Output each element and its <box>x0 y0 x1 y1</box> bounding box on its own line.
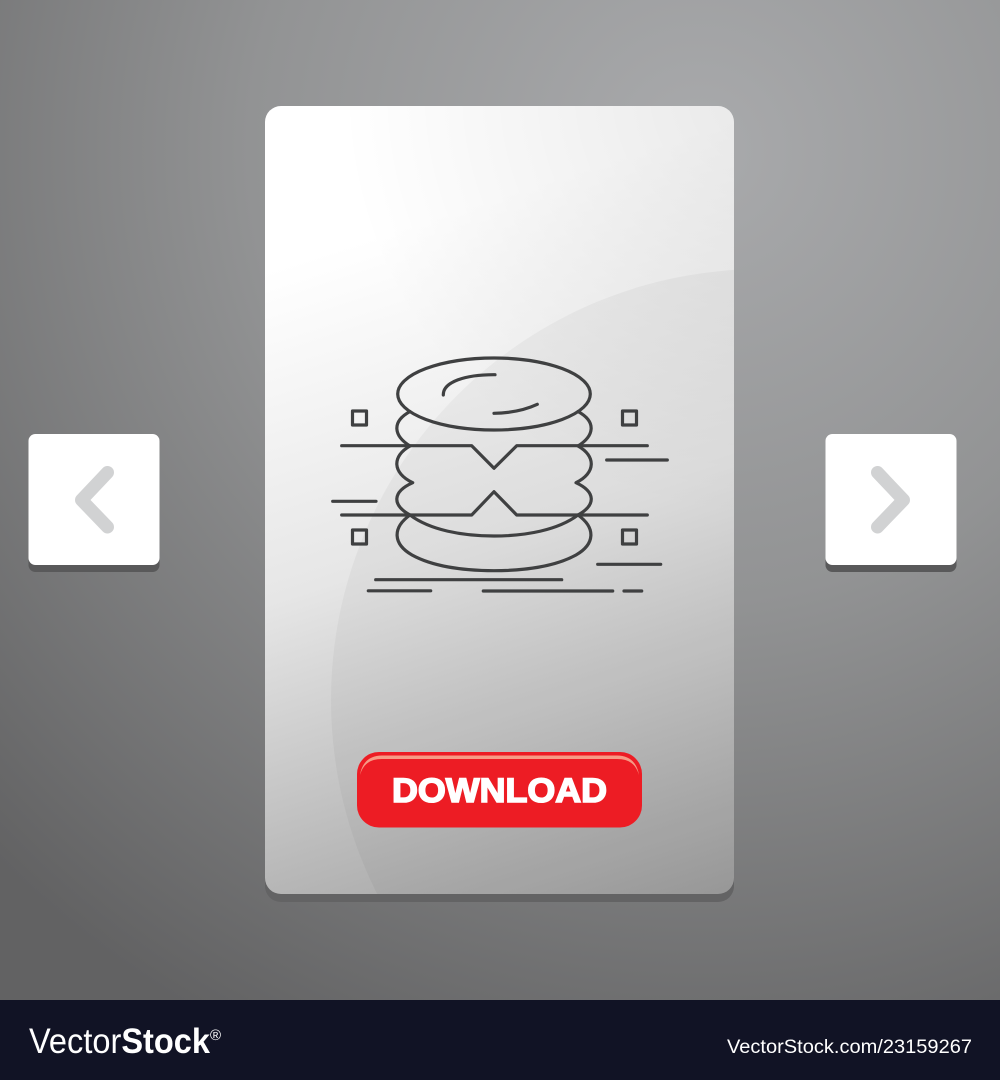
lower split line <box>342 492 647 515</box>
icon: right chevron <box>878 472 904 527</box>
lower disc arc <box>410 515 578 536</box>
button highlight <box>360 756 639 775</box>
upper split line <box>342 446 647 468</box>
button label: DOWNLOAD <box>392 772 607 810</box>
left side contour <box>397 412 591 571</box>
registered mark: ® <box>210 1027 221 1044</box>
dashes <box>333 460 667 591</box>
disc highlights <box>443 375 537 413</box>
right arrow button <box>826 434 956 572</box>
VectorStock logo: VectorStock <box>29 1022 210 1061</box>
small squares <box>352 411 636 544</box>
footer band <box>0 1000 1000 1080</box>
download button <box>357 752 642 828</box>
left arrow button <box>28 434 160 572</box>
icon: left chevron <box>82 472 108 527</box>
top disc <box>398 358 590 430</box>
image id text: VectorStock.com/23159267 <box>727 1037 972 1058</box>
central panel <box>265 106 734 902</box>
icon: database stack <box>333 358 667 591</box>
